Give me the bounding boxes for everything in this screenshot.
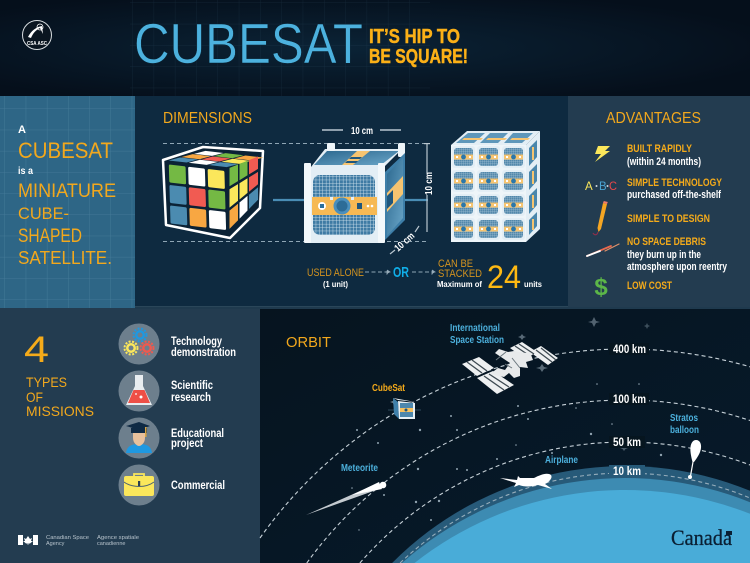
label: airplane: Airplane [545,454,578,466]
caption: used alone: USED ALONE [307,267,364,279]
label: or: OR [393,264,409,281]
heading: orbit: ORBIT [286,334,331,351]
icon: Rubik's cube [163,147,263,238]
title: CUBESAT [134,12,363,76]
icon: burning debris [587,244,619,256]
label: commercial: Commercial [171,480,225,492]
icon: meteorite [306,482,386,515]
icon: agency logo [22,20,52,50]
label: stratos balloon: Stratos [670,412,698,424]
panel: missions [0,308,260,563]
altitude labels: 100 km [613,394,646,406]
panel: orbit [135,307,750,563]
number 4: 4 [24,329,49,370]
item: no space debris: they burn up in the [627,249,701,261]
item: built rapidly: (within 24 months) [627,156,701,168]
panel: dimensions [135,96,568,308]
icon: CubeSat single unit [304,143,405,243]
icon: balloon [688,440,701,479]
panel: definition: MINIATURE [18,181,116,202]
panel: definition: is a [18,166,33,177]
label: cubesat: CubeSat [372,382,405,394]
item: no space debris: NO SPACE DEBRIS [627,236,706,248]
caption: can be stacked: 24 [487,259,521,295]
icon: stacked CubeSats [451,131,540,242]
label: stratos balloon: balloon [670,424,699,436]
arrow: or to stacked [412,270,435,274]
icon: A B C: A [585,181,593,193]
dimension label: depth: 10 cm [393,231,417,254]
altitude labels [609,343,649,478]
item: no space debris [627,236,728,273]
label: educational project [171,428,224,450]
panel: definition: A [18,124,26,136]
label: meteorite: Meteorite [341,462,378,474]
icon: graduate [118,418,160,458]
altitude labels: 50 km [613,437,641,449]
altitude labels: 400 km [613,344,646,356]
caption: can be stacked: units [524,279,542,289]
footer: agency names: Agency [46,541,65,547]
dimension label: width [322,126,401,137]
heading: types of missions: MISSIONS [26,403,94,419]
dimension label: width: 10 cm [351,126,373,137]
panel: definition: CUBESAT [18,138,113,163]
label: educational project: Educational [171,428,224,440]
label: educational project: project [171,438,203,450]
footer: agency names: Canadian Space [46,535,89,541]
caption: can be stacked: STACKED [438,268,482,280]
icon: lightning [595,146,610,162]
item: simple to design: SIMPLE TO DESIGN [627,213,710,225]
panel: definition: SHAPED [18,226,82,247]
label: scientific research: Scientific [171,380,213,392]
stars [351,317,662,531]
label: scientific research: research [171,392,211,404]
icon: gears [118,324,160,364]
icon: small CubeSat [388,398,421,419]
icon: airplane [500,474,552,489]
label: technology demonstration [171,336,236,359]
icon: A B C: B [599,181,607,193]
earth [392,466,750,563]
icon: briefcase [118,464,160,506]
panel: header background [0,0,750,96]
heading: types of missions [26,374,94,419]
icon: flask [118,370,160,412]
heading: types of missions: OF [26,389,43,405]
subtitle: BE SQUARE! [369,45,468,68]
label: technology demonstration: demonstration [171,347,236,359]
panel: advantages [568,96,750,308]
altitude labels: 10 km [613,466,641,478]
subtitle [369,25,468,68]
heading: types of missions: TYPES [26,374,67,390]
panel: definition [0,96,135,308]
subtitle: IT’S HIP TO [369,25,460,48]
item: simple technology [627,177,723,201]
caption: can be stacked: Maximum of [437,279,482,289]
label: international space station: Space Station [450,334,504,346]
heading: dimensions: DIMENSIONS [163,110,252,127]
panel: definition: SATELLITE. [18,248,112,268]
footer: agency names [46,535,139,547]
caption: used alone: (1 unit) [323,280,348,289]
icon: Canadian flag [18,535,38,545]
label: stratos balloon [670,412,699,436]
dimension label: height: 10 cm [424,172,435,195]
label: technology demonstration: Technology [171,336,222,348]
label: international space station [450,322,504,346]
caption: can be stacked: CAN BE [438,258,473,270]
item: built rapidly: BUILT RAPIDLY [627,143,693,155]
item: built rapidly [627,143,701,168]
heading: advantages: ADVANTAGES [606,110,701,127]
icon: dollar: $ [594,274,608,301]
orbit lines [260,349,750,563]
caption: can be stacked [437,258,542,295]
arrow: alone to or [365,270,390,274]
icon: space station [462,342,558,394]
item: simple technology: SIMPLE TECHNOLOGY [627,177,723,189]
logo: Canada wordmark: Canada [671,525,732,550]
dimension label: height [424,143,435,232]
icon: A B C: C [609,181,617,193]
label: scientific research [171,380,213,404]
caption: used alone [307,267,364,289]
footer: agency names: Agence spatiale [97,535,139,541]
icon: A B C [585,181,617,193]
item: low cost: LOW COST [627,280,672,292]
label: international space station: International [450,322,500,334]
icon: agency logo: CSA ASC [27,41,47,47]
panel: definition: CUBE- [18,204,69,223]
icon: pencil [593,201,608,235]
footer: agency names: canadienne [97,541,125,547]
item: simple technology: purchased off-the-shelf [627,189,721,201]
